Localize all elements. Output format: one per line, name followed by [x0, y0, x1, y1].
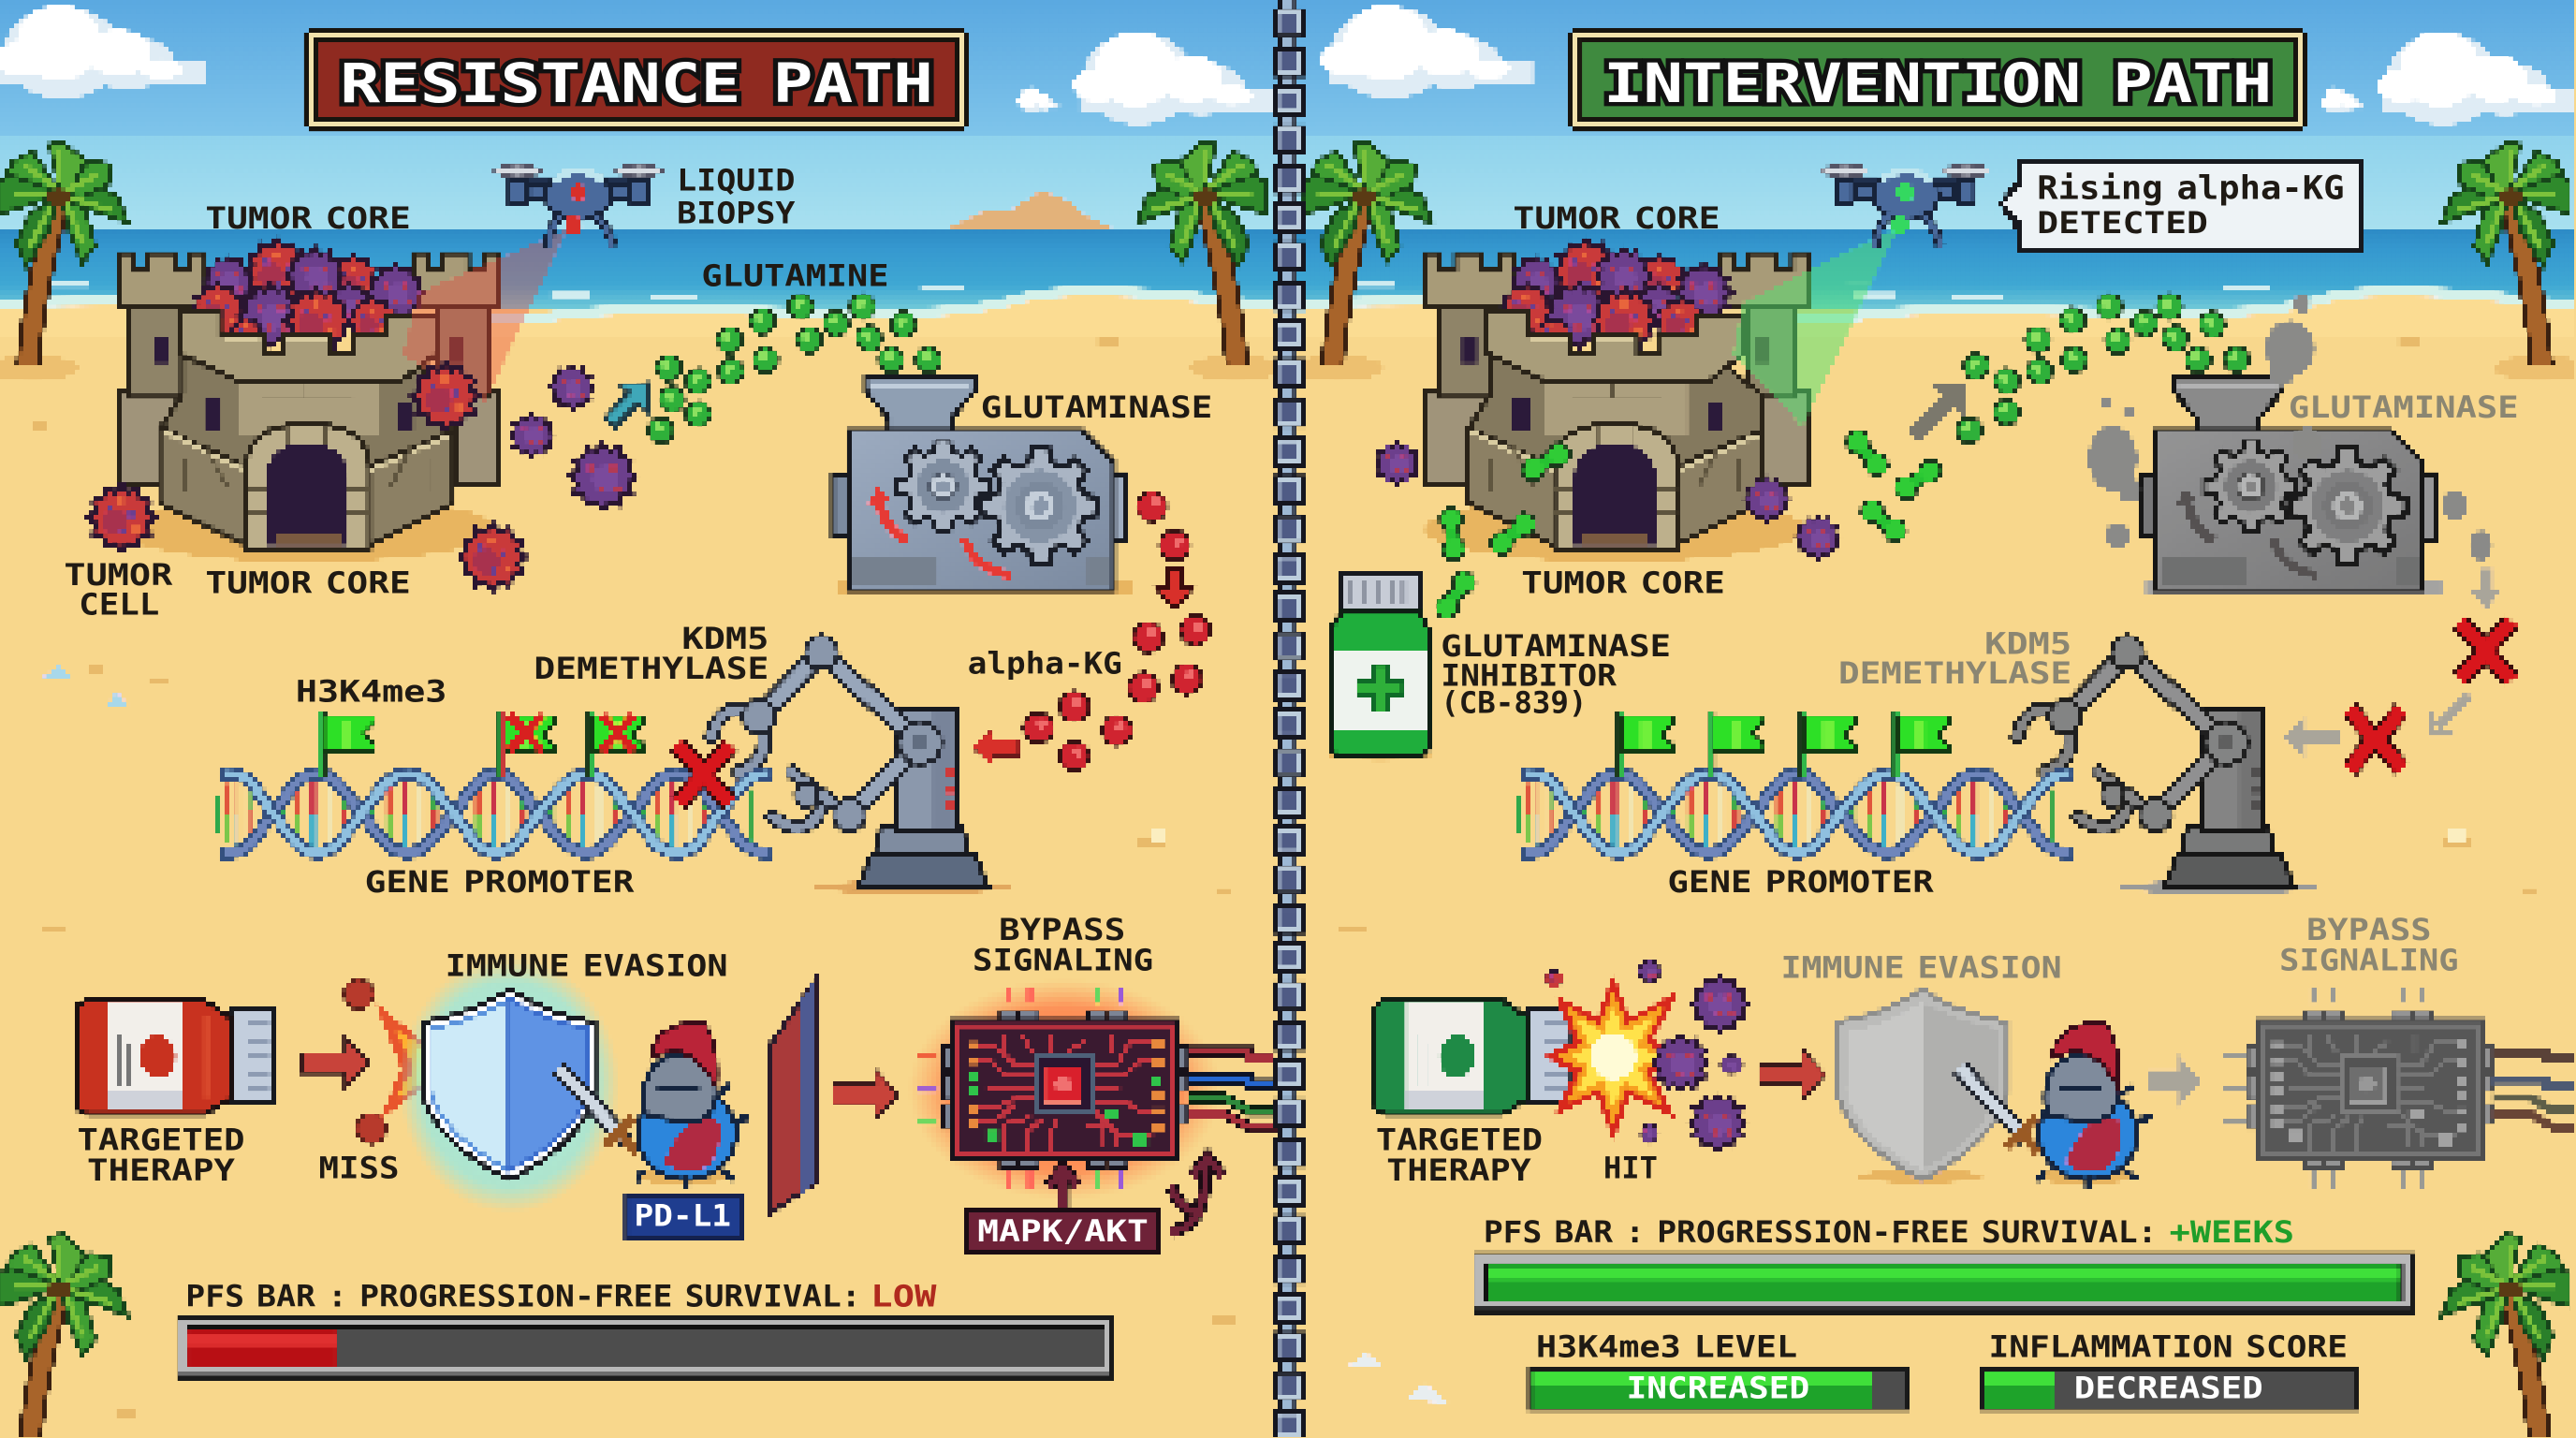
label: KDM5 demethylase disabled: DEMETHYLASE: [1838, 657, 2071, 691]
MAPK/AKT box and arrows: [964, 1157, 1222, 1254]
arrow: to chip: [833, 1070, 899, 1119]
label: tumor cell: [64, 559, 173, 622]
label: H3K4me3: H3K4me3: [296, 675, 446, 709]
label: MAPK/AKT: MAPK/AKT: [977, 1215, 1149, 1249]
label: gene promoter: GENE PROMOTER: [365, 866, 636, 900]
PD-L1 wall: [768, 981, 815, 1214]
label: targeted therapy: [1376, 1124, 1543, 1188]
label: targeted therapy: TARGETED: [1376, 1124, 1543, 1158]
label: bypass signaling: SIGNALING: [973, 944, 1153, 977]
label: increased: INCREASED: [1627, 1372, 1809, 1406]
label: PFS weeks: PFS BAR : PROGRESSION-FREE SURVIVAL:: [1484, 1216, 2157, 1250]
arrow: down to alpha-KG: [1157, 568, 1193, 609]
robot arm: disabled: [2017, 636, 2317, 894]
label: H3K4me3 level: H3K4me3 LEVEL: [1536, 1331, 1797, 1365]
glutaminase machine: [833, 378, 1134, 594]
label: KDM5 demethylase disabled: [1838, 628, 2071, 691]
tumor warrior: [559, 1022, 751, 1188]
targeted therapy bottle: green: [1375, 1001, 1573, 1114]
tumor cells: [88, 366, 637, 591]
label: PFS low: PFS BAR : PROGRESSION-FREE SURVIVAL:: [185, 1280, 861, 1313]
arrow: gray uptake: [1908, 383, 1967, 444]
label: glutaminase inhibitor: GLUTAMINASE: [1441, 630, 1671, 664]
big X on demethylation: [678, 744, 730, 803]
label: bypass signaling: BYPASS: [999, 914, 1125, 947]
signaling chip: red: [916, 986, 1278, 1190]
PD-L1 box: [624, 1195, 744, 1239]
label: liquid biopsy: BIOPSY: [677, 198, 795, 231]
label: targeted therapy: THERAPY: [1386, 1154, 1531, 1188]
castle: tumor core: [117, 239, 500, 562]
arrow: blocked diagonal: [2432, 695, 2469, 733]
label: PFS low: LOW: [871, 1280, 938, 1313]
label: PD-L1: PD-L1: [634, 1199, 731, 1233]
flags: [317, 710, 644, 775]
callout text: Rising alpha-KG: [2037, 169, 2345, 207]
castle: tumor core: [1425, 239, 1808, 562]
biopsy scan beam: red: [402, 230, 567, 403]
label: tumor core bottom: TUMOR CORE: [1521, 567, 1725, 601]
label: glutamine: GLUTAMINE: [701, 259, 889, 293]
label: targeted therapy: [77, 1124, 245, 1188]
label: targeted therapy: THERAPY: [87, 1154, 235, 1188]
clouds: [0, 5, 2576, 125]
title plate: resistance: [302, 28, 970, 133]
H3K4me3 level bar: [1528, 1365, 1909, 1412]
title: resistance path: RESISTANCE PATH: [340, 51, 933, 115]
label: glutaminase: GLUTAMINASE: [981, 391, 1212, 425]
arrow: gray: [2147, 1055, 2202, 1108]
alpha-KG dots: [1022, 490, 1211, 772]
arrow: blocked down: [2467, 568, 2504, 609]
label: glutaminase inhibitor: [1441, 630, 1671, 721]
label: tumor core top: TUMOR CORE: [205, 202, 411, 236]
X: blocked alpha-KG: [2349, 710, 2402, 769]
label: decreased: DECREASED: [2074, 1372, 2263, 1406]
title: intervention path: INTERVENTION PATH: [1603, 51, 2272, 115]
label: tumor cell: TUMOR: [64, 559, 173, 593]
shield: disabled: [1837, 990, 2008, 1183]
label: tumor core top: TUMOR CORE: [1513, 202, 1720, 236]
background: right beach: [1305, 228, 2576, 1438]
label: glutaminase disabled: GLUTAMINASE: [2289, 391, 2519, 425]
label: targeted therapy: TARGETED: [77, 1124, 245, 1158]
signaling chip: disabled: [2224, 986, 2576, 1190]
callout text: DETECTED: [2037, 207, 2208, 241]
label: glutaminase inhibitor: (CB-839): [1441, 687, 1587, 721]
DNA: gene promoter: [216, 774, 766, 853]
label: glutaminase inhibitor: INHIBITOR: [1441, 660, 1617, 694]
background: sky: [0, 0, 2576, 231]
label: inflammation score: INFLAMMATION SCORE: [1989, 1331, 2348, 1365]
label: bypass signaling: [973, 914, 1153, 977]
chip glow: [909, 979, 1221, 1199]
miss deflection: [344, 979, 453, 1144]
label: KDM5 demethylase: KDM5: [681, 623, 768, 656]
arrow: to shield: [1760, 1050, 1825, 1099]
drone: [494, 166, 662, 250]
label: tumor cell: CELL: [79, 588, 159, 622]
label: immune evasion: IMMUNE EVASION: [446, 950, 728, 984]
label: PFS weeks: +WEEKS: [2170, 1216, 2294, 1250]
label: liquid biopsy: [677, 165, 795, 231]
label: immune evasion disabled: IMMUNE EVASION: [1781, 951, 2062, 985]
scan beam: green: [1734, 227, 1899, 427]
label: alpha-KG: alpha-KG: [968, 648, 1122, 682]
label: bypass signaling disabled: [2279, 914, 2459, 977]
tumor cell on castle wall: [412, 362, 478, 430]
panel: intervention path art: [1327, 28, 2576, 1412]
label: hit: HIT: [1603, 1152, 1658, 1185]
callout text: [2037, 169, 2345, 241]
targeted therapy bottle: red: [77, 1001, 274, 1114]
arrow: gray left: [2282, 718, 2339, 757]
glutamine dots: [646, 292, 943, 445]
smoke: [2088, 294, 2492, 560]
label: KDM5 demethylase: DEMETHYLASE: [534, 653, 768, 686]
explosion: [1544, 975, 1695, 1142]
inhibitor pills: [1429, 425, 1948, 624]
label: tumor core bottom: TUMOR CORE: [205, 567, 411, 601]
robot arm: KDM5: [711, 636, 1010, 894]
glutaminase machine: disabled: [2141, 378, 2441, 594]
label: bypass signaling disabled: SIGNALING: [2279, 944, 2459, 977]
label: gene promoter: GENE PROMOTER: [1667, 866, 1935, 900]
medicine bottle: inhibitor: [1327, 574, 1432, 761]
label: KDM5 demethylase: [534, 623, 768, 686]
glutamine dots: [1955, 292, 2251, 445]
label: bypass signaling disabled: BYPASS: [2306, 914, 2432, 947]
shield with glow: [399, 956, 620, 1212]
arrow: therapy: [302, 1038, 370, 1088]
sand details: [33, 339, 2539, 1419]
tumor warrior: [1960, 1022, 2152, 1188]
chain divider: [1271, 0, 1305, 1438]
flags: [1616, 710, 1949, 775]
X: blocked: [2459, 621, 2512, 681]
drone: [1822, 166, 1989, 250]
PFS bar: high: [1472, 1252, 2413, 1314]
label: liquid biopsy: LIQUID: [677, 165, 795, 198]
destroyed tumor cells: [1544, 960, 1748, 1151]
label: miss: MISS: [318, 1152, 399, 1185]
PFS bar: low: [176, 1316, 1114, 1380]
title plate: intervention: [1569, 28, 2306, 133]
DNA: gene promoter: [1517, 774, 2067, 853]
arrow: alpha-KG to demethylase: [973, 729, 1018, 766]
tumor cells: [1375, 441, 1840, 560]
inflammation score bar: [1981, 1365, 2360, 1412]
arrow: glutamine uptake: [603, 381, 651, 431]
panel: resistance path art: [77, 28, 1278, 1380]
island: [948, 191, 1114, 228]
callout: [1998, 157, 2364, 252]
label: KDM5 demethylase disabled: KDM5: [1984, 628, 2071, 662]
background: left beach: [0, 228, 1305, 1438]
